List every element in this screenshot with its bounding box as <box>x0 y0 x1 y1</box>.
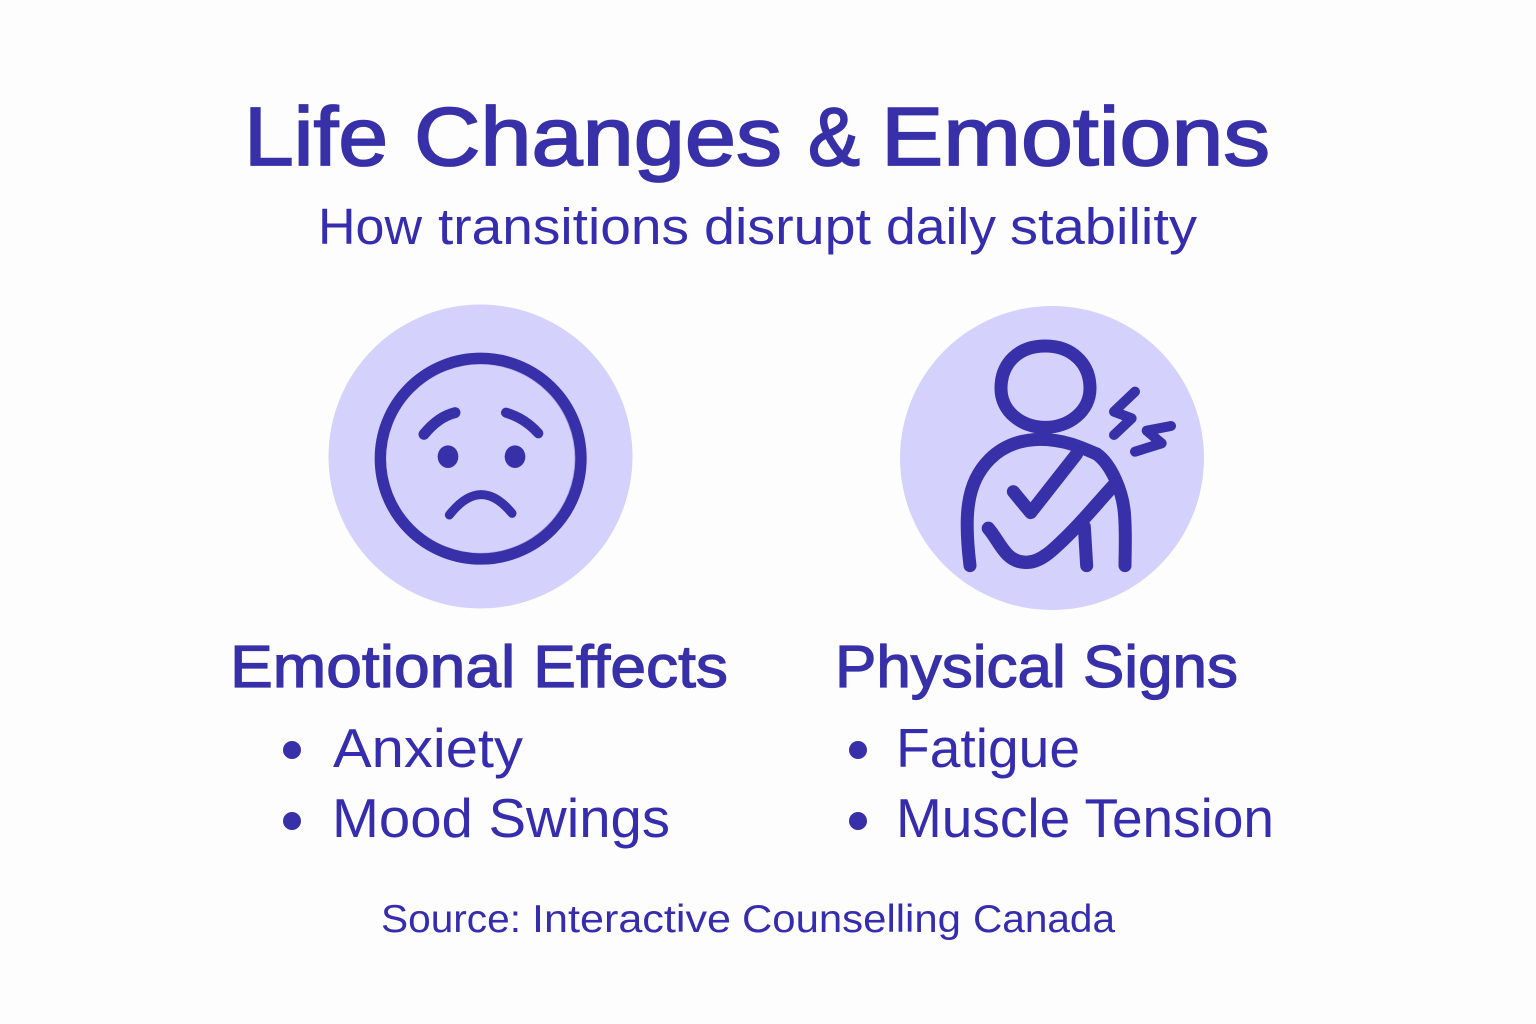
list: emotional effects: Mood Swings <box>332 787 670 849</box>
list: emotional effects: Anxiety <box>333 717 524 779</box>
list: physical signs <box>849 717 1274 849</box>
subtitle: disrupt <box>704 198 871 255</box>
subtitle: stability <box>1010 198 1198 255</box>
source note: Interactive <box>532 898 731 941</box>
source note: Canada <box>973 898 1115 941</box>
icon: person with shoulder pain <box>900 306 1204 610</box>
source note: Counselling <box>742 898 961 941</box>
title: Changes <box>414 90 782 183</box>
panel: emotional effects <box>230 304 728 849</box>
heading: physical signs: Physical Signs <box>835 634 1238 700</box>
subtitle: daily <box>886 198 997 255</box>
list: physical signs: Fatigue <box>896 717 1080 779</box>
icon: sad face <box>328 304 632 608</box>
title: Emotions <box>881 90 1270 183</box>
title: Life <box>244 90 388 183</box>
subtitle: How <box>318 198 422 255</box>
heading: emotional effects: Emotional Effects <box>230 634 728 700</box>
title: & <box>808 90 860 183</box>
source note: Source: <box>381 898 521 941</box>
panel: physical signs <box>835 306 1274 849</box>
list: emotional effects <box>283 717 670 849</box>
list: physical signs: Muscle Tension <box>896 787 1274 849</box>
subtitle: transitions <box>438 198 689 255</box>
